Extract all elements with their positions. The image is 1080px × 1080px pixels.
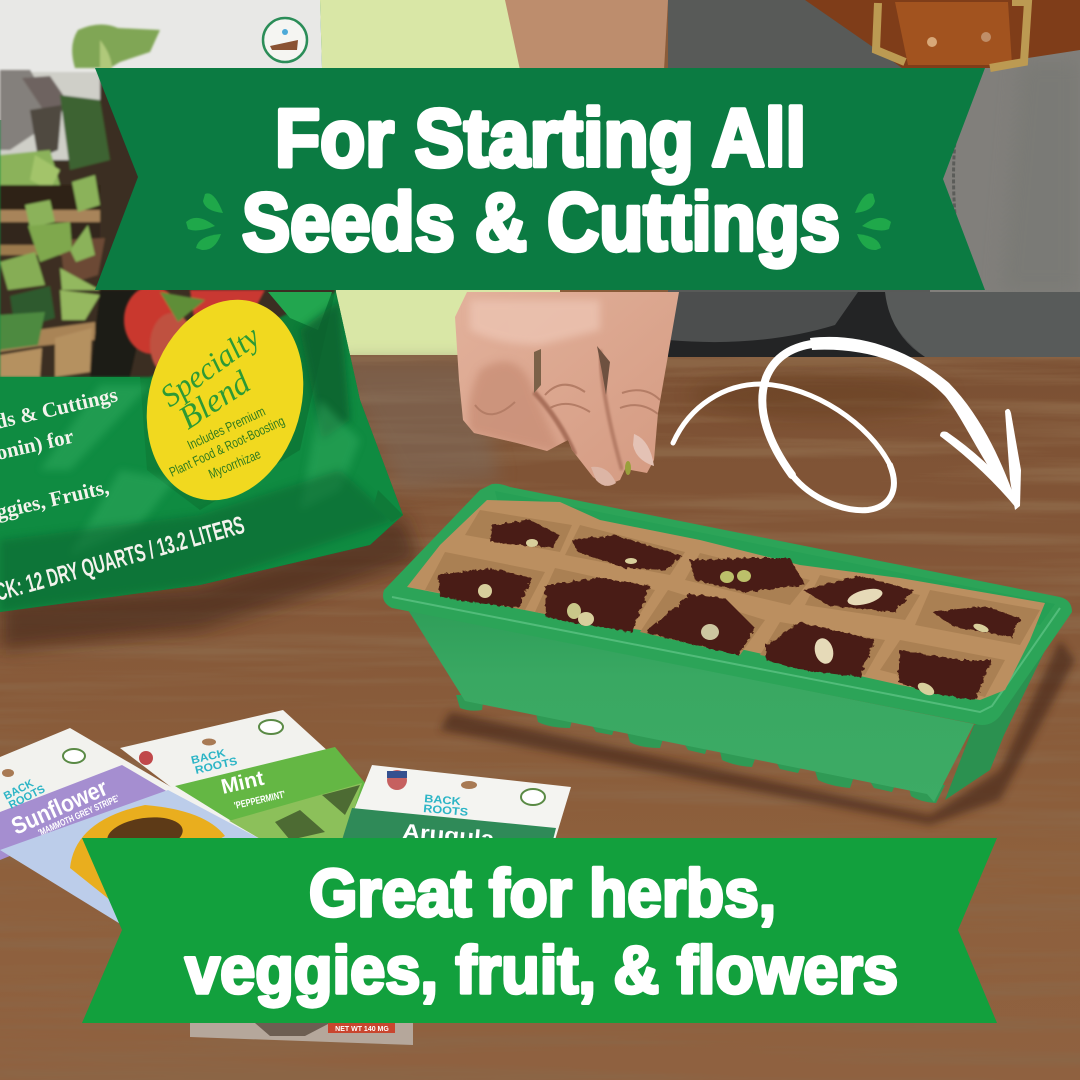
seed packet: mint: Mint xyxy=(219,767,266,799)
seeds xyxy=(478,539,990,698)
top banner xyxy=(95,68,985,290)
thumb nail xyxy=(633,434,654,466)
seed packet: mint xyxy=(120,710,365,840)
seed packet: bottom packet edge xyxy=(190,1020,413,1045)
bag description text xyxy=(0,382,120,524)
tray side shadow piece xyxy=(945,610,1065,800)
tray body xyxy=(408,610,974,802)
seed starter tray xyxy=(383,484,1072,803)
bottom banner xyxy=(82,838,997,1023)
seed packet: sunflower: Sunflower xyxy=(7,774,112,840)
soil cells xyxy=(438,520,1020,700)
seed packet: sunflower: 'MAMMOTH GREY STRIPE' xyxy=(37,793,121,838)
forearm xyxy=(505,0,668,70)
seed packet: arugula xyxy=(342,765,571,851)
peat pot tray xyxy=(407,500,1045,700)
bag corner seal xyxy=(374,490,403,522)
seed packet: bottom packet edge: NET WT 140 MG xyxy=(335,1026,389,1033)
seedling top plant xyxy=(72,24,160,68)
pots and soil rows xyxy=(0,184,100,208)
seed held in fingers xyxy=(625,461,631,475)
seed packet: sunflower: BACK xyxy=(2,778,36,803)
more efficient watering badge xyxy=(263,18,307,62)
icon: right leaf sprig xyxy=(855,193,891,250)
seed packet: mint: ROOTS xyxy=(194,756,239,777)
yellow specialty blend badge: Specialty xyxy=(154,318,266,414)
soil bag xyxy=(0,0,403,612)
seed packet: mint: BACK xyxy=(190,748,227,767)
seed packet: arugula: BACK xyxy=(424,792,462,808)
index finger nail xyxy=(591,467,616,486)
leather belt and brass buckle xyxy=(805,0,1080,68)
seed packet: arugula: ROOTS xyxy=(423,802,469,819)
curly white arrow xyxy=(673,337,1021,510)
yellow specialty blend badge: Includes Premium xyxy=(185,403,268,453)
text: Great for herbs,: Great for herbs, xyxy=(309,856,776,931)
tray feet xyxy=(456,695,945,803)
yellow specialty blend badge: Plant Food & Root-Boosting xyxy=(167,413,287,480)
text: veggies, fruit, & flowers: veggies, fruit, & flowers xyxy=(185,933,898,1008)
yellow specialty blend badge: Blend xyxy=(173,364,257,437)
bag green panel with wrinkles xyxy=(0,292,403,612)
hand dropping seed xyxy=(455,292,679,486)
seed packet: arugula: Arugula xyxy=(402,820,496,851)
tomatoes xyxy=(122,290,266,368)
seed packet: sunflower: ROOTS xyxy=(7,783,47,812)
peat cell walls xyxy=(425,510,1040,697)
bag white top panel xyxy=(0,0,322,120)
seed packet: sunflower xyxy=(0,728,262,925)
background wall xyxy=(300,0,560,360)
heading: For Starting All: For Starting All xyxy=(275,93,806,184)
yellow specialty blend badge xyxy=(124,281,326,519)
wooden table xyxy=(0,355,1080,1080)
icon: left leaf sprig xyxy=(186,193,223,250)
tray rim xyxy=(383,484,1072,725)
bag seedling photo xyxy=(0,24,335,377)
yellow specialty blend badge: Mycorrhizae xyxy=(206,446,263,482)
seed packet: mint: 'PEPPERMINT' xyxy=(233,788,286,811)
man's trousers xyxy=(668,0,1080,357)
heading: Seeds & Cuttings: Seeds & Cuttings xyxy=(242,177,840,268)
